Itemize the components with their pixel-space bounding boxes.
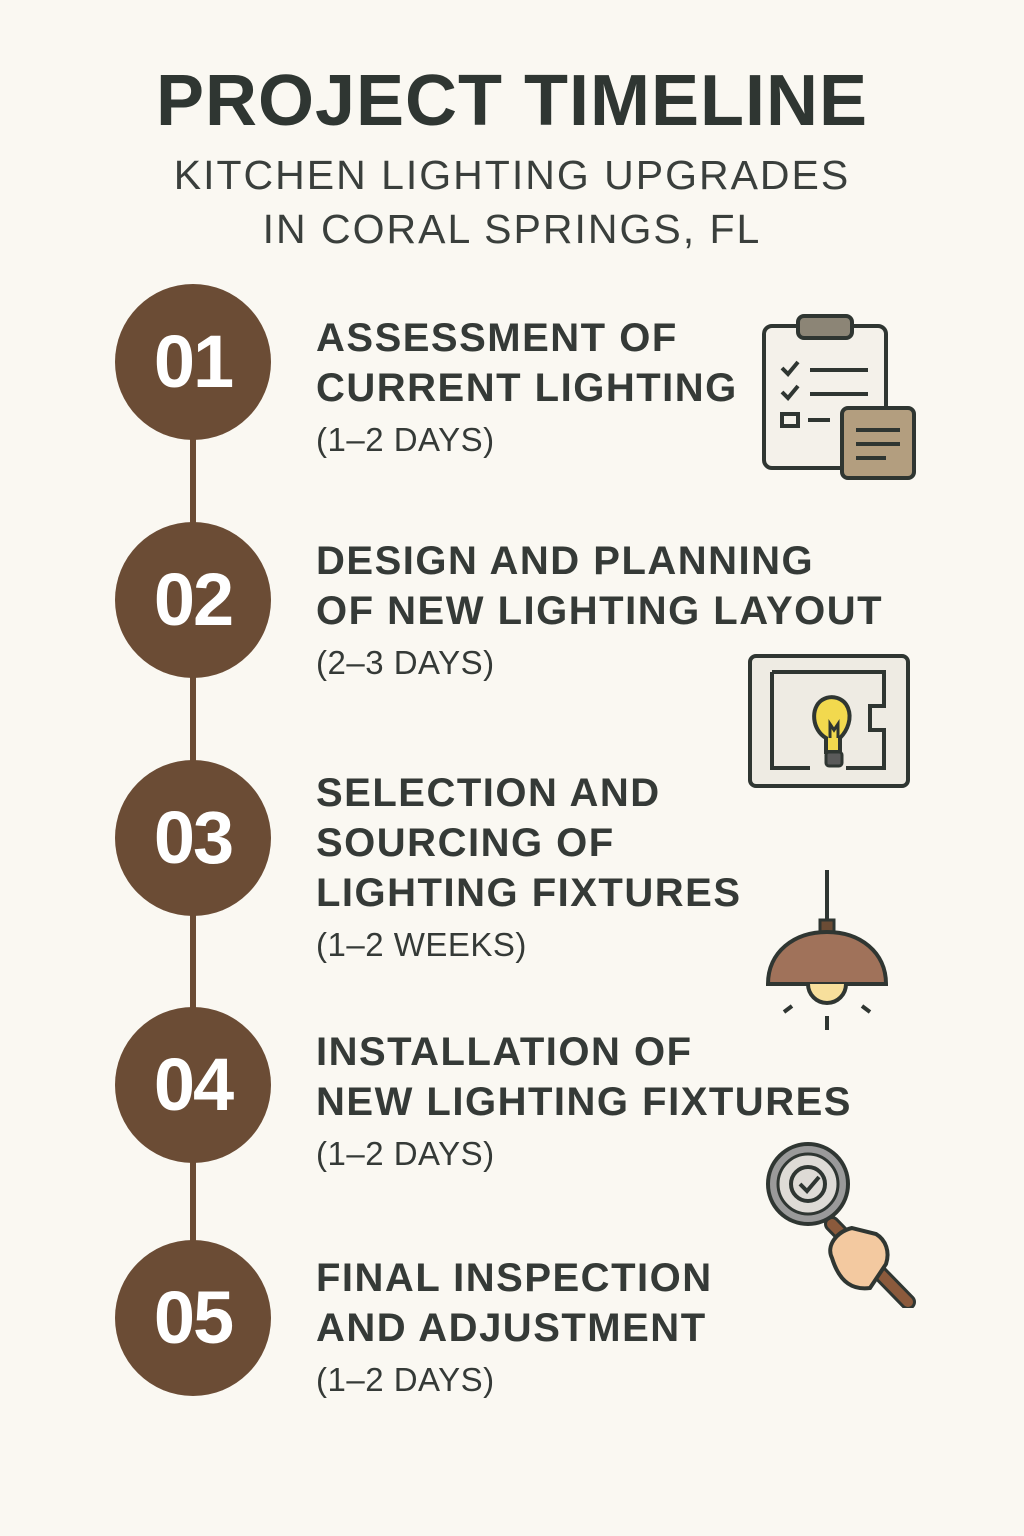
icon: magnifier with hand xyxy=(766,1142,916,1308)
step 3 text: (1–2 WEEKS) xyxy=(316,926,527,963)
step 4 circle xyxy=(115,1007,271,1163)
step 1 text xyxy=(316,316,738,458)
step 4 text: (1–2 DAYS) xyxy=(316,1135,495,1172)
icon: pendant lamp xyxy=(766,870,888,1030)
step 1 text: ASSESSMENT OF xyxy=(316,316,678,360)
step 5 circle: 05 xyxy=(154,1276,232,1359)
step 2 circle: 02 xyxy=(154,558,232,641)
step 1 text: (1–2 DAYS) xyxy=(316,421,495,458)
step 3 text xyxy=(316,771,742,963)
timeline line xyxy=(190,400,196,1280)
step 3 text: SELECTION AND xyxy=(316,771,661,815)
step 4 text xyxy=(316,1030,852,1172)
subtitle xyxy=(174,152,850,252)
title: PROJECT TIMELINE xyxy=(156,61,868,141)
step 5 text: FINAL INSPECTION xyxy=(316,1256,713,1300)
step 5 circle xyxy=(115,1240,271,1396)
step 5 text: (1–2 DAYS) xyxy=(316,1361,495,1398)
step 3 circle xyxy=(115,760,271,916)
step 1 circle: 01 xyxy=(154,320,232,403)
step 1 circle xyxy=(115,284,271,440)
step 2 text xyxy=(316,539,883,681)
step 3 circle: 03 xyxy=(154,796,232,879)
step 4 text: INSTALLATION OF xyxy=(316,1030,693,1074)
step 3 text: LIGHTING FIXTURES xyxy=(316,871,742,915)
subtitle: KITCHEN LIGHTING UPGRADES xyxy=(174,152,850,198)
icon: clipboard xyxy=(762,314,916,480)
step 4 circle: 04 xyxy=(154,1043,232,1126)
step 5 text xyxy=(316,1256,713,1398)
step 5 text: AND ADJUSTMENT xyxy=(316,1306,707,1350)
subtitle: IN CORAL SPRINGS, FL xyxy=(263,206,761,252)
step 4 text: NEW LIGHTING FIXTURES xyxy=(316,1080,852,1124)
step 2 text: DESIGN AND PLANNING xyxy=(316,539,814,583)
step 3 text: SOURCING OF xyxy=(316,821,615,865)
step 2 text: (2–3 DAYS) xyxy=(316,644,495,681)
icon: blueprint bulb xyxy=(748,654,910,788)
step 2 circle xyxy=(115,522,271,678)
step 1 text: CURRENT LIGHTING xyxy=(316,366,738,410)
step 2 text: OF NEW LIGHTING LAYOUT xyxy=(316,589,883,633)
